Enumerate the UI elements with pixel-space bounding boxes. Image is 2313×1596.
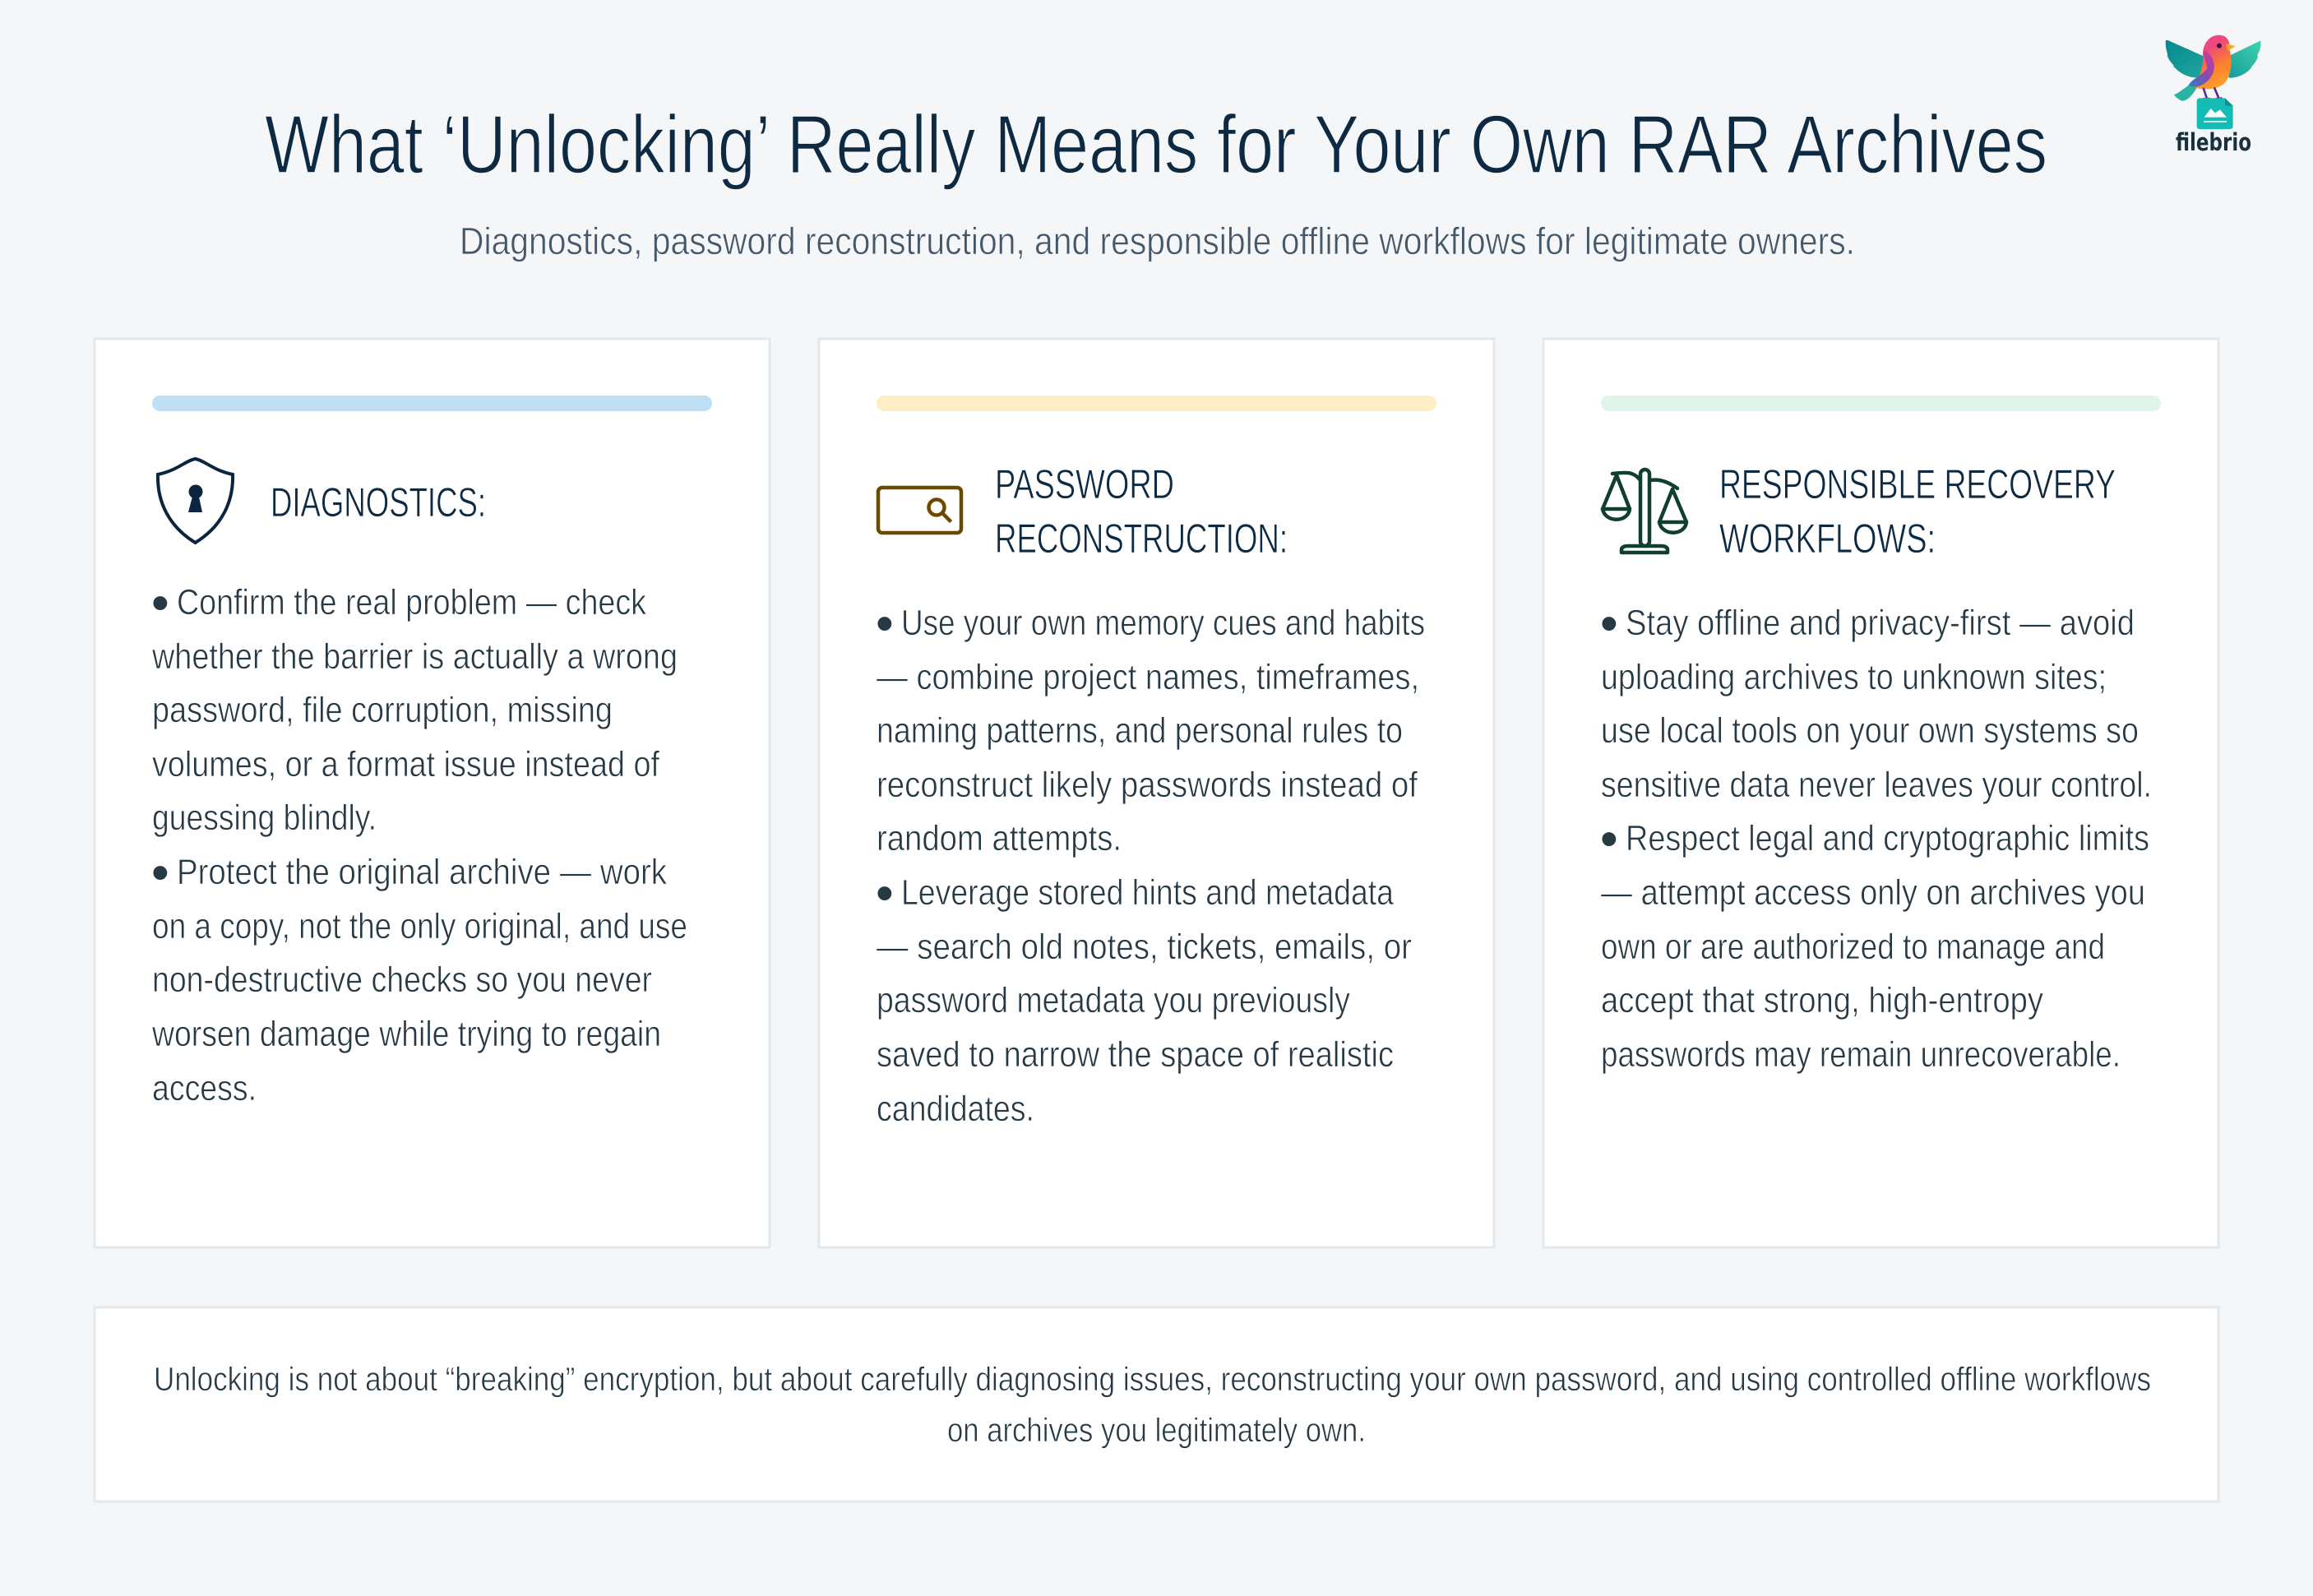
text block: diagnostics bullets: non-destructive checks so you never (152, 960, 652, 1000)
panel: responsible recovery workflows (1543, 339, 2218, 1247)
heading: diagnostics: DIAGNOSTICS: (271, 479, 486, 525)
text block: recovery bullets: sensitive data never leaves your control. (1601, 765, 2152, 805)
text block: recovery bullets: use local tools on your own systems so (1601, 710, 2139, 751)
logo: filebrio bird (2166, 35, 2260, 156)
text block: recovery bullets: — attempt access only on archives you (1601, 872, 2145, 913)
text block: password bullets: — combine project names, timeframes, (877, 657, 1419, 697)
text block: password bullets (876, 595, 1425, 1129)
text block: password bullets: • (876, 865, 894, 922)
accent bar: yellow (877, 396, 1436, 411)
text block: recovery bullets: Stay offline and privacy-first — avoid (1626, 603, 2135, 643)
legs (2203, 88, 2223, 103)
accent bar: green (1601, 396, 2161, 411)
text block: recovery bullets: • (1600, 811, 1618, 867)
text block: password bullets: reconstruct likely passwords instead of (877, 765, 1418, 805)
beak (2226, 44, 2236, 51)
text block: recovery bullets: passwords may remain unrecoverable. (1601, 1034, 2121, 1075)
text block: diagnostics bullets: whether the barrier is actually a wrong (151, 636, 678, 677)
icon: search box (878, 488, 961, 533)
accent bar: blue (152, 396, 712, 411)
icon: shield with keyhole (158, 459, 233, 543)
text block: diagnostics bullets: worsen damage while trying to regain (151, 1014, 661, 1054)
text block: diagnostics bullets: access. (152, 1068, 257, 1108)
text block: password bullets: saved to narrow the space of realistic (877, 1034, 1394, 1075)
text block: conclusion (154, 1360, 2151, 1449)
text block: diagnostics bullets: guessing blindly. (152, 798, 377, 838)
heading: password reconstruction (995, 461, 1288, 562)
right wing (2226, 41, 2260, 78)
heading: responsible recovery workflows: RESPONSIBLE RECOVERY (1719, 461, 2116, 507)
text block: password bullets: Leverage stored hints and metadata (901, 872, 1394, 913)
text block: diagnostics bullets: password, file corruption, missing (152, 690, 613, 730)
text block: diagnostics bullets: on a copy, not the only original, and use (152, 906, 687, 946)
left wing (2166, 40, 2207, 77)
text block: password bullets: • (876, 595, 894, 652)
tail (2174, 84, 2197, 101)
text block: password bullets: Use your own memory cues and habits (901, 603, 1425, 643)
text block: diagnostics bullets: volumes, or a format issue instead of (152, 744, 660, 784)
file icon (2197, 98, 2233, 129)
text block: password bullets: naming patterns, and personal rules to (877, 710, 1403, 751)
subtitle: Diagnostics, password reconstruction, and responsible offline workflows for legitimate owners. (460, 220, 1855, 262)
text block: recovery bullets: own or are authorized to manage and (1601, 927, 2105, 967)
text block: recovery bullets: • (1600, 595, 1618, 652)
text block: diagnostics bullets: Confirm the real problem — check (177, 582, 647, 622)
text block: recovery bullets: Respect legal and cryptographic limits (1626, 818, 2149, 858)
text block: recovery bullets: accept that strong, high-entropy (1601, 980, 2043, 1020)
text block: diagnostics bullets: • (151, 575, 169, 631)
text block: password bullets: — search old notes, tickets, emails, or (877, 927, 1412, 967)
panel: diagnostics (95, 339, 770, 1247)
eye (2217, 44, 2222, 49)
heading: password reconstruction: PASSWORD (995, 461, 1174, 507)
text block: password bullets: password metadata you previously (877, 980, 1350, 1020)
text block: password bullets: random attempts. (877, 818, 1122, 858)
text block: password bullets: candidates. (877, 1089, 1034, 1129)
heading: password reconstruction: RECONSTRUCTION: (995, 516, 1288, 562)
panel: password reconstruction (819, 339, 1494, 1247)
panel: conclusion (95, 1307, 2218, 1501)
text block: diagnostics bullets: • (151, 844, 169, 901)
belly shade (2189, 50, 2214, 87)
body (2193, 35, 2231, 89)
text block: conclusion: on archives you legitimately own. (947, 1411, 1366, 1449)
text block: recovery bullets (1600, 595, 2152, 1075)
icon: balance scales (1603, 470, 1686, 553)
text block: diagnostics bullets: Protect the original archive — work (177, 852, 668, 892)
text block: diagnostics bullets (151, 575, 687, 1108)
logo wordmark: filebrio (2176, 128, 2251, 156)
text block: recovery bullets: uploading archives to unknown sites; (1601, 657, 2107, 697)
heading: responsible recovery workflows: WORKFLOWS: (1719, 516, 1936, 562)
heading: responsible recovery workflows (1719, 461, 2116, 562)
